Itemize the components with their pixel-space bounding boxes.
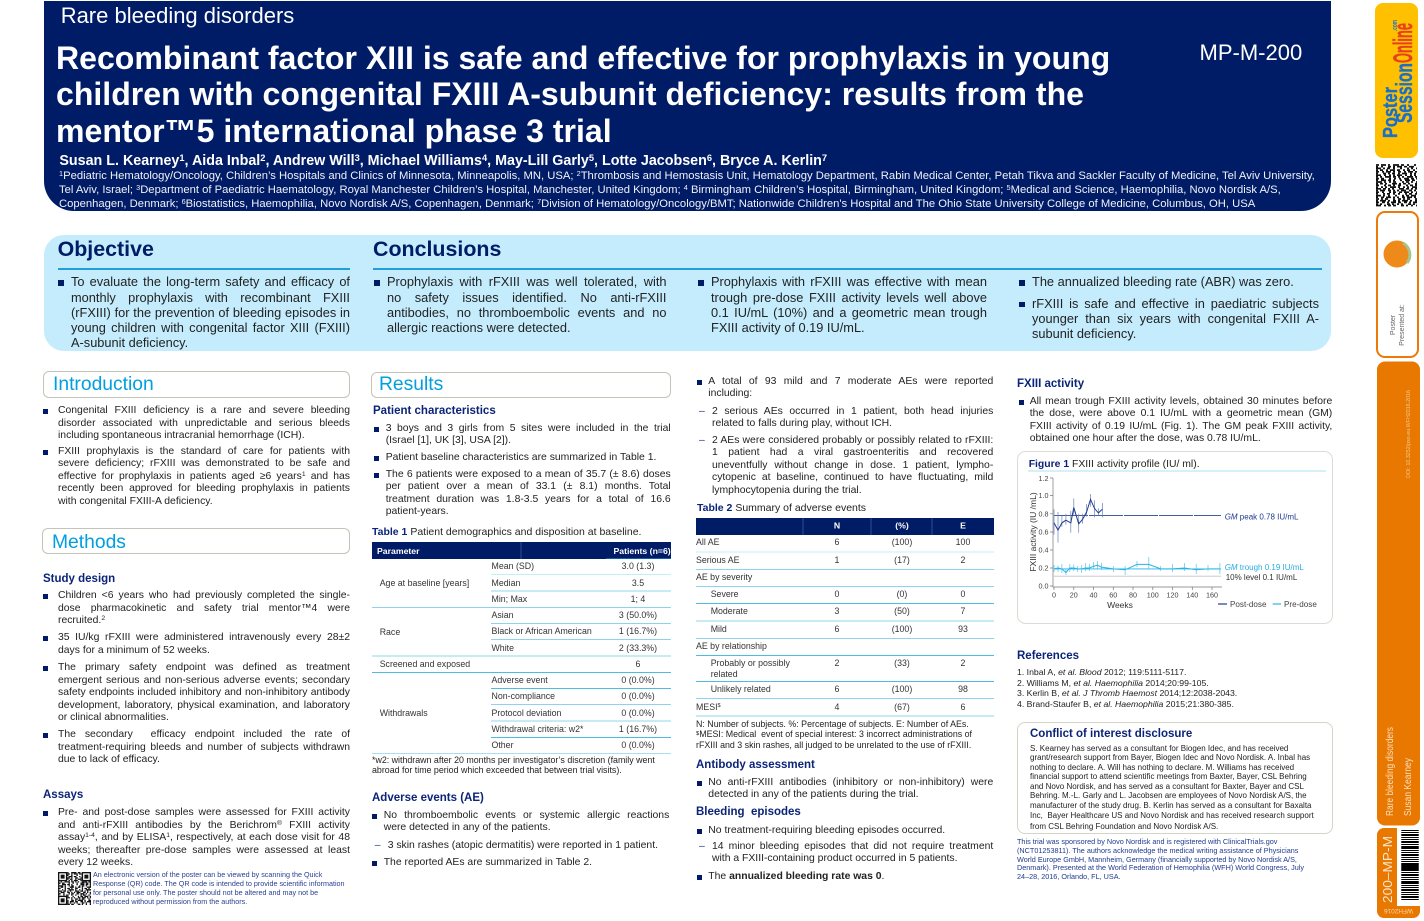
text: QR code note: reproduced without permission from the authors.: [93, 897, 247, 906]
text: disclosure: Inc, Bayer Healthcare US and Novo Nordisk and has received research support: [1030, 811, 1314, 820]
table 1 rows: Non-compliance: [492, 691, 555, 701]
text: patient bullet 3: per patient over a mean of 33.1 (± 8.1) months. Total: [386, 481, 671, 492]
x axis: 60: [1109, 590, 1117, 600]
panel: conflict of interest disclosure: [1017, 722, 1333, 834]
text: study design bullet 1: Children <6 years who had previously completed the single-: [58, 590, 350, 601]
table 2 rows: (0): [897, 589, 907, 599]
text: reference list: 3. Kerlin B, et al. J Thromb Haemost 2014;12:2038-2043.: [1017, 688, 1237, 698]
text: assays bullet: weeks; thereafter pre-dose samples were assessed at least: [58, 845, 350, 856]
table 1 rows: Withdrawals: [380, 708, 428, 718]
table 2 header: [696, 518, 994, 535]
logo: PosterSessionOnline: .com: [1392, 20, 1399, 31]
x axis: 140: [1186, 590, 1198, 600]
text: introduction bullet 1: [43, 405, 350, 441]
text: bleeding dash item: 14 minor bleeding episodes that did not require treatment: [712, 841, 993, 852]
text: conclusion 3: The annualized bleeding rate (ABR) was zero.: [1032, 274, 1294, 289]
text: antibody bullet: No anti-rFXIII antibodies (inhibitory or non-inhibitory) were: [708, 777, 993, 788]
text: DOI: DOI: 10.3252/pso.eu.WFH2016.2016: [1406, 390, 1412, 478]
panel: presented at: [1377, 212, 1418, 357]
x axis: 100: [1147, 590, 1159, 600]
table 1 rows: Min; Max: [492, 594, 528, 604]
text: reference list: 2. Williams M, et al. Haemophilia 2014;20:99-105.: [1017, 678, 1209, 688]
table 1 rows: 6: [636, 659, 641, 669]
panel: results: [371, 372, 671, 868]
text: introduction bullet 2: [43, 446, 350, 507]
text: study design bullet 1: dose pharmacokinetic and safety trial mentor™4 were: [58, 603, 350, 614]
text: FXIII activity bullet: the dose, were above 0.1 IU/mL with a geometric mean (GM): [1030, 408, 1332, 419]
table 1 header: Patients (n=6): [613, 546, 671, 556]
y axis: 0.2: [1038, 564, 1048, 572]
post-dose series: [1054, 494, 1102, 543]
legend: Post-dose: [1230, 600, 1267, 609]
text: bleeding dash item: [699, 841, 994, 864]
text: patient bullet 3: treatment duration was 1.8-3.5 years for a total of 16.6: [386, 494, 671, 505]
series labels: [1225, 512, 1304, 582]
icon: congress logo: [1384, 240, 1410, 268]
heading: methods: [42, 528, 350, 554]
text: antibody bullet: detected in any of the patients during the trial.: [708, 789, 919, 800]
text: study design bullet 3: [43, 662, 350, 723]
table 1 rows: Black or African American: [492, 626, 592, 636]
text: patient bullet 1: 3 boys and 3 girls from 5 sites were included in the trial: [386, 423, 671, 434]
heading: conflict of interest: Conflict of interest disclosure: [1030, 728, 1192, 740]
text: WFH2016: WFH2016: [1384, 907, 1413, 914]
text: conclusion 4: subunit deficiency.: [1032, 326, 1136, 341]
text: introduction bullet 1: disorder associated with unpredictable and serious bleeds: [58, 418, 350, 429]
table 1 rows: Protocol deviation: [492, 708, 562, 718]
title: [56, 40, 1110, 149]
header banner: [44, 1, 1331, 211]
text: bleeding dash item: with a FXIII-containing product occurred in 5 patients.: [712, 853, 957, 864]
text: conclusion 1: allergic reactions were detected.: [387, 320, 571, 335]
table 2 rows: 4: [835, 702, 840, 712]
text: author: Susan Kearney: [1403, 758, 1414, 816]
text: conclusion 4: rFXIII is safe and effective in paediatric subjects: [1032, 296, 1319, 311]
text: study design bullet 3: emergent serious and non-serious adverse events; secondary: [58, 675, 350, 686]
text: AE bullet 1: No thromboembolic events or systemic allergic reactions: [384, 810, 669, 821]
text: assays bullet: every 12 weeks.: [58, 857, 133, 868]
panel: methods: [42, 528, 350, 906]
table 1 rows: Other: [492, 740, 514, 750]
table 2: [696, 518, 994, 716]
text: patient bullet 3: [374, 469, 671, 517]
text: disclosure: manufacturer of the study drug. B. Kerlin has served as a consultant for Baxalta: [1030, 801, 1311, 810]
text: related AE dash item: lymphocytopenia during the trial.: [712, 485, 862, 496]
text: conclusion 2: [698, 274, 987, 335]
table 1 rows: Screened and exposed: [380, 659, 470, 669]
divider: objective: [58, 268, 350, 270]
text: disclosure: from CSL Behring Foundation and Novo Nordisk A/S.: [1030, 822, 1218, 831]
table 2 rows: 100: [956, 537, 970, 547]
text: conclusion 4: [1019, 296, 1319, 341]
text: disclosure: financial support to attend scientific meetings from Baxter, Bayer, CSL Behring: [1030, 772, 1307, 781]
table 1 rows: White: [492, 643, 514, 653]
table 1 rows: 3.5: [632, 578, 644, 588]
x axis: 40: [1090, 590, 1098, 600]
table 1 rows: Withdrawal criteria: w2*: [492, 724, 584, 734]
table 2 rows: 1: [835, 555, 840, 565]
table 2 rows: 2: [961, 555, 966, 565]
legend: [1218, 600, 1317, 609]
text: conclusion 2: FXIII activity of 0.19 IU/mL.: [711, 320, 865, 335]
table 1 rows: 2 (33.3%): [619, 643, 657, 653]
text: study design bullet 4: The secondary efficacy endpoint included the rate of: [58, 729, 350, 740]
text: related AE dash item: [699, 435, 993, 496]
text: QR code note: for personal use only. The poster should not be altered and may not be: [93, 888, 318, 897]
table 2 rows: Unlikely related: [711, 684, 771, 694]
subheading: patient characteristics: Patient characteristics: [373, 405, 496, 417]
text: topic: Rare bleeding disorders: [1385, 727, 1396, 816]
panel: references: [1017, 649, 1333, 711]
text: QR code note: Response (QR) code. The QR code is intended to provide scientific information: [93, 879, 345, 888]
panel: results continued: –: [699, 435, 705, 446]
text: related AE dash item: cytopenic at baseline, continued to have fluctuating, mild: [712, 472, 993, 483]
logo: PosterSessionOnline: [1375, 3, 1418, 158]
text: AE bullet 1: were detected in any of the patients.: [384, 822, 551, 833]
y axis: 0.0: [1038, 582, 1048, 590]
text: table 2 footnote: rFXIII and 3 skin rashes, all judged to be unrelated to the use of rFXIII.: [696, 740, 971, 750]
text: study design bullet 2: 35 IU/kg rFXIII were administered intravenously every 28±2: [58, 632, 350, 643]
text: objective: young children with congenital factor XIII (FXIII): [71, 320, 350, 335]
text: AE totals bullet: [697, 376, 993, 399]
table 2 rows: Mild: [711, 624, 727, 634]
text: disclosure: and Novo Nordisk, and has served as a consultant for Baxter, Bayer and CSL: [1030, 782, 1304, 791]
subheading: FXIII activity: FXIII activity: [1017, 378, 1084, 390]
title: Recombinant factor XIII is safe and effective for prophylaxis in young: [56, 40, 1110, 76]
figure title: Figure 1 FXIII activity profile (IU/ ml).: [1029, 459, 1200, 470]
table 2 rows: (100): [892, 684, 912, 694]
table 2 rows: 0: [835, 589, 840, 599]
x axis: [1052, 587, 1218, 610]
table 2 rows: 3: [835, 606, 840, 616]
caption: table 2: Table 2 Summary of adverse events: [697, 502, 866, 514]
table 2 rows: [696, 537, 970, 712]
text: study design bullet 4: treatment-requiring bleeds and number of subjects withdrawn: [58, 742, 350, 753]
text: presented at: Poster: [1390, 314, 1397, 335]
x axis: 80: [1129, 590, 1137, 600]
poster number: MP-M-200: [1200, 40, 1302, 65]
text: introduction bullet 1: Congenital FXIII deficiency is a rare and severe bleeding: [58, 405, 350, 416]
text: disclosure: grant/research support from Bayer, Biogen Idec and Novo Nordisk. A. Inbal has: [1030, 753, 1310, 762]
table 2 rows: related: [711, 669, 738, 679]
text: objective: monthly prophylaxis with recombinant FXIII: [71, 290, 350, 305]
text: introduction bullet 1: including spontaneous intracranial hemorrhage (ICH).: [58, 430, 305, 441]
text: reference list: [1017, 667, 1237, 710]
text: objective: To evaluate the long-term safety and efficacy of: [71, 274, 350, 289]
table 2 rows: AE by severity: [696, 572, 753, 582]
text: introduction bullet 2: with congenital FXIII-A deficiency.: [58, 496, 213, 507]
table 2 rows: (100): [892, 537, 912, 547]
text: conclusion 4: younger than six years with congenital FXIII A-: [1032, 311, 1319, 326]
text: conclusion 2: trough pre-dose FXIII activity levels well above: [711, 290, 987, 305]
heading: introduction: Introduction: [53, 374, 154, 395]
text: table 2 footnote: [696, 719, 972, 750]
sidebar: poster session online: [1370, 0, 1424, 921]
logo: PosterSessionOnline: Poster: [1380, 87, 1402, 138]
text: QR code note: An electronic version of the poster can be viewed by scanning the Quick: [93, 870, 322, 879]
table 1 rows: 1 (16.7%): [619, 626, 657, 636]
table 2 header: (%): [895, 520, 909, 530]
table 1 rows: 1; 4: [631, 594, 645, 604]
text: FXIII activity bullet: FXIII activity of 0.19 IU/mL (Fig. 1). The GM peak FXIII activity,: [1030, 421, 1332, 432]
subheading: adverse events: Adverse events (AE): [372, 792, 484, 804]
text: patient bullet 3: The 6 patients were exposed to a mean of 35.7 (± 8.6) doses: [386, 469, 671, 480]
table 2 rows: 2: [961, 658, 966, 668]
table 1 rows: Race: [380, 627, 400, 637]
table 2 rows: 6: [835, 624, 840, 634]
icon: sidebar QR code: [1376, 164, 1417, 206]
text: AE totals bullet: including:: [708, 388, 752, 399]
heading: results: Results: [379, 374, 443, 395]
table 2 rows: 6: [835, 684, 840, 694]
table 1 header: Parameter: [377, 546, 420, 556]
panel: orange strip: [1377, 362, 1420, 826]
panel: results continued: [696, 376, 994, 882]
text: introduction bullet 2: recently been approved for bleeding prophylaxis in patients: [58, 483, 350, 494]
heading: objective: Objective: [58, 237, 154, 261]
panel: FXIII activity: [1017, 376, 1333, 624]
table 2 rows: (100): [892, 624, 912, 634]
text: reference list: 4. Brand-Staufer B, et al. Haemophilia 2015;21:380-385.: [1017, 699, 1234, 709]
subheading: bleeding episodes: Bleeding episodes: [696, 806, 801, 818]
text: study design bullet 3: or clinical abnormalities.: [58, 712, 169, 723]
text: disclosure: Behring. M.-L. Garly and L. Jacobsen are employees of Novo Nordisk A/S, the: [1030, 791, 1307, 800]
y axis: 1.0: [1038, 491, 1048, 500]
authors: Susan L. Kearney1, Aida Inbal2, Andrew Will3, Michael Williams4, May-Lill Garly5, Lotte Jacobsen6, Bryce A. Kerlin7: [59, 153, 827, 169]
table 1 rows: 3 (50.0%): [619, 610, 657, 620]
table 2 header: E: [960, 520, 966, 530]
text: conclusion 1: [374, 274, 666, 335]
table 2 rows: 2: [835, 658, 840, 668]
y axis: [1028, 474, 1222, 590]
text: introduction bullet 2: severe deficiency; rFXIII was demonstrated to be safe and: [58, 458, 350, 469]
table 1 rows: 0 (0.0%): [621, 708, 655, 718]
reference lines: [1054, 516, 1221, 576]
text: AE bullet 2: The reported AEs are summarized in Table 2.: [384, 857, 592, 868]
table 1 header: [372, 542, 671, 559]
table 2 rows: (17): [894, 555, 910, 565]
text: table 1 footnote: abroad for time period which exceeded that between trial visits).: [372, 765, 622, 775]
table 2 rows: MESI: [696, 702, 718, 712]
table 1 rows: 0 (0.0%): [621, 675, 655, 685]
text: patient bullet 1: [374, 423, 671, 446]
text: disclosure: nothing to declare. A. Will has nothing to declare. M. Williams has received: [1030, 763, 1294, 772]
text: serious AE dash item: related to falls during play, without ICH.: [712, 418, 892, 429]
panel: results continued: –: [699, 841, 705, 852]
heading: conclusions: Conclusions: [373, 237, 501, 261]
text: conclusion 1: antibodies, no thromboembolic events and no: [387, 305, 666, 320]
text: conclusion 1: no safety issues identified. No anti-rFXIII: [387, 290, 666, 305]
text: study design bullet 3: The primary safety endpoint was defined as treatment: [58, 662, 350, 673]
text: FXIII activity bullet: [1030, 396, 1332, 446]
text: table 2 footnote: N: Number of subjects. %: Percentage of subjects. E: Number of AEs.: [696, 719, 969, 729]
icon: barcode: [1401, 830, 1419, 901]
text: related AE dash item: 1 patient had a viral gastroenteritis and recovered: [712, 447, 993, 458]
x axis: 20: [1070, 590, 1078, 600]
panel: results continued: –: [699, 406, 705, 417]
text: antibody bullet: [697, 777, 993, 800]
y axis: 1.2: [1038, 474, 1048, 483]
table 1 rows: 1 (16.7%): [619, 724, 657, 734]
subheading: antibody assessment: Antibody assessment: [696, 759, 815, 771]
table 1: [372, 542, 671, 754]
table 1 rows: 0 (0.0%): [621, 740, 655, 750]
y axis: 0.8: [1038, 510, 1048, 518]
panel: barcode tag: [1377, 828, 1420, 918]
table 2 rows: (33): [894, 658, 910, 668]
y axis: FXIII activity (IU /mL): [1028, 492, 1038, 572]
text: FXIII activity bullet: All mean trough FXIII activity levels, obtained 30 minutes before: [1030, 396, 1332, 407]
text: study design bullet 3: development, laboratory, physical examination, and laboratory: [58, 700, 350, 711]
text: objective: [58, 274, 350, 350]
text: AE totals bullet: A total of 93 mild and 7 moderate AEs were reported: [708, 376, 993, 387]
text: study design bullet 4: [43, 729, 350, 765]
text: study design bullet 4: due to lack of efficacy.: [58, 754, 160, 765]
text: related AE dash item: uneventfully without change in dose. 1 patient, lympho-: [712, 460, 993, 471]
x axis: 160: [1206, 590, 1218, 600]
text: bleeding bullet 2: The annualized bleeding rate was 0.: [708, 871, 884, 882]
caption: table 1: Table 1 Patient demographics and disposition at baseline.: [372, 526, 641, 538]
affiliations: Copenhagen, Denmark; 6Biostatistics, Haemophilia, Novo Nordisk A/S, Copenhagen, Denmark; 7Division of Hematology/Oncology/BMT; Nationwide Children's Hospital and The Ohio State University College of Medicine, Columbus, OH, USA: [59, 197, 1255, 210]
panel: results: –: [375, 840, 380, 851]
text: introduction bullet 2: FXIII prophylaxis is the standard of care for patients with: [58, 446, 350, 457]
divider: conclusions: [373, 268, 1322, 270]
text: patient bullet 1: (Israel [1], UK [3], USA [2]).: [386, 435, 511, 446]
text: study design bullet 1: [43, 590, 350, 626]
text: reference list: 1. Inbal A, et al. Blood 2012; 119:5111-5117.: [1017, 667, 1186, 677]
text: study design bullet 3: safety endpoints included inhibitory and non-inhibitory antibody: [58, 687, 350, 698]
text: presented at: [1390, 304, 1406, 346]
text: objective: A-subunit deficiency.: [71, 335, 188, 350]
table 1 rows: 0 (0.0%): [621, 691, 655, 701]
table 2 rows: 93: [958, 624, 968, 634]
table 2 rows: 6: [835, 537, 840, 547]
table 2 rows: $: [718, 703, 721, 709]
text: sponsorship note: [1017, 838, 1333, 882]
text: conclusion 1: Prophylaxis with rFXIII was well tolerated, with: [387, 274, 666, 289]
text: related AE dash item: 2 AEs were considered probably or possibly related to rFXIII:: [712, 435, 993, 446]
panel: objective and conclusions: [44, 235, 1331, 351]
text: FXIII activity bullet: obtained one hour after the dose, was 0.78 IU/mL.: [1030, 433, 1261, 444]
title: mentor™5 international phase 3 trial: [56, 113, 612, 149]
text: conclusion 2: Prophylaxis with rFXIII was effective with mean: [711, 274, 987, 289]
text: patient bullet 3: patient-years.: [386, 506, 449, 517]
text: serious AE dash item: [699, 406, 993, 429]
text: table 1 footnote: [372, 755, 655, 775]
text: assays bullet: [43, 807, 350, 868]
table 1 rows: [380, 561, 657, 750]
subheading: assays: Assays: [43, 789, 83, 801]
text: sponsorship note: 24–28, 2016, Orlando, FL, USA.: [1017, 872, 1121, 881]
text: bleeding bullet 1: No treatment-requiring bleeding episodes occurred.: [708, 825, 945, 836]
text: assays bullet: Pre- and post-dose samples were assessed for FXIII activity: [58, 807, 350, 818]
text: sponsorship note: World Europe GmbH, Mannheim, Germany (financially supported by Novo Nordisk A/S,: [1017, 854, 1297, 864]
logo: PosterSessionOnline: Session: [1391, 63, 1417, 123]
x axis: Weeks: [1107, 600, 1133, 610]
text: introduction bullet 2: effective for prophylaxis in patients aged ≥6 years1 and has: [58, 471, 350, 482]
table 2 rows: All AE: [696, 537, 720, 547]
text: table 1 footnote: *w2: withdrawn after 20 months per investigator’s discretion (family went: [372, 755, 655, 765]
text: assays bullet: and anti-rFXIII antibodies by the Berichrom® FXIII activity: [58, 820, 350, 831]
y axis: 0.6: [1038, 528, 1048, 536]
affiliations: Tel Aviv, Israel; 3Department of Paediatric Haematology, Royal Manchester Children’s Hospital, Manchester, United Kingdom; 4 Birmingham Children’s Hospital, Birmingham, United Kingdom; 5Medical and Science, Haemophilia, Novo Nordisk A/S,: [59, 183, 1281, 196]
text: sponsorship note: (NCT01253811). The authors acknowledge the medical writing assistance of Physicians: [1017, 846, 1298, 855]
table 2 rows: Moderate: [711, 606, 748, 616]
text: assays bullet: assay1-4, and by ELISA1, respectively, at each dose visit for 48: [58, 832, 350, 843]
table 2 rows: 0: [961, 589, 966, 599]
text: objective: (rFXIII) for the prevention of bleeding episodes in: [71, 305, 350, 320]
table 2 header: N: [834, 520, 840, 530]
table 1 rows: Asian: [492, 610, 514, 620]
title: children with congenital FXIII A-subunit deficiency: results from the: [56, 76, 1084, 112]
legend: Pre-dose: [1284, 600, 1317, 609]
text: QR code note: [93, 870, 345, 906]
table 1 rows: Adverse event: [492, 675, 548, 685]
text: study design bullet 2: [43, 632, 350, 656]
heading: results: [371, 372, 671, 398]
pre-dose series: [1054, 557, 1220, 575]
text: serious AE dash item: 2 serious AEs occurred in 1 patient, both head injuries: [712, 406, 993, 417]
table 1 rows: Mean (SD): [492, 561, 534, 571]
topic label: Rare bleeding disorders: [61, 3, 294, 28]
affiliations: [59, 169, 1315, 210]
table 2 rows: Severe: [711, 589, 739, 599]
table 2 rows: AE by relationship: [696, 641, 767, 651]
text: AE dash item: 3 skin rashes (atopic dermatitis) were reported in 1 patient.: [388, 840, 658, 851]
subheading: study design: Study design: [43, 573, 115, 585]
chart: figure 1 FXIII activity profile: [1017, 451, 1333, 624]
text: conclusion 2: 0.1 IU/mL (10%) and a geometric mean trough: [711, 305, 987, 320]
heading: references: References: [1017, 650, 1079, 662]
text: patient bullet 2: Patient baseline characteristics are summarized in Table 1.: [386, 452, 656, 463]
text: sponsorship note: This trial was sponsored by Novo Nordisk and is registered with ClinicalTrials.gov: [1017, 837, 1277, 846]
table 1 rows: 3.0 (1.3): [622, 561, 654, 571]
heading: methods: Methods: [52, 532, 126, 553]
heading: introduction: [43, 371, 350, 398]
table 2 rows: Probably or possibly: [711, 658, 791, 668]
text: table 2 footnote: $MESI: Medical event of special interest: 3 incorrect administrations of: [696, 729, 972, 739]
table 1 rows: Age at baseline [years]: [380, 578, 469, 588]
table 2 rows: (67): [894, 702, 910, 712]
series labels: GM peak 0.78 IU/mL: [1225, 512, 1299, 522]
series labels: GM trough 0.19 IU/mL: [1225, 563, 1304, 572]
text: sponsorship note: Denmark). Presented at the World Federation of Hemophilia (WFH) World Congress, July: [1017, 863, 1304, 872]
table 2 rows: Serious AE: [696, 555, 740, 565]
text: study design bullet 2: days for a minimum of 52 weeks.: [58, 645, 210, 656]
table 2 rows: 98: [958, 684, 968, 694]
affiliations: 1Pediatric Hematology/Oncology, Children’s Hospitals and Clinics of Minnesota, Minneapolis, MN, USA; 2Thrombosis and Hemostasis Unit, Hematology Department, Rabin Medical Center, Petah Tikva and Sackler Faculty of Medicine, Tel Aviv University,: [59, 169, 1315, 182]
icon: poster QR code: [58, 872, 91, 905]
table 2 rows: 7: [961, 606, 966, 616]
table 2 rows: (50): [894, 606, 910, 616]
text: poster code: 200–MP-M: [1380, 836, 1395, 903]
x axis: 0: [1052, 590, 1056, 600]
series labels: 10% level 0.1 IU/mL: [1226, 573, 1298, 582]
y axis: 0.4: [1038, 546, 1048, 554]
table 2 rows: 6: [961, 702, 966, 712]
text: disclosure: [1030, 744, 1314, 832]
x axis: 120: [1166, 590, 1178, 600]
text: presented at: Presented at:: [1399, 304, 1406, 346]
text: study design bullet 1: recruited.2: [58, 615, 105, 626]
table 1 rows: Median: [492, 578, 520, 588]
text: AE bullet 1: [372, 810, 669, 833]
text: disclosure: S. Kearney has served as a consultant for Biogen Idec, and has received: [1030, 744, 1288, 752]
panel: introduction: [43, 371, 350, 507]
